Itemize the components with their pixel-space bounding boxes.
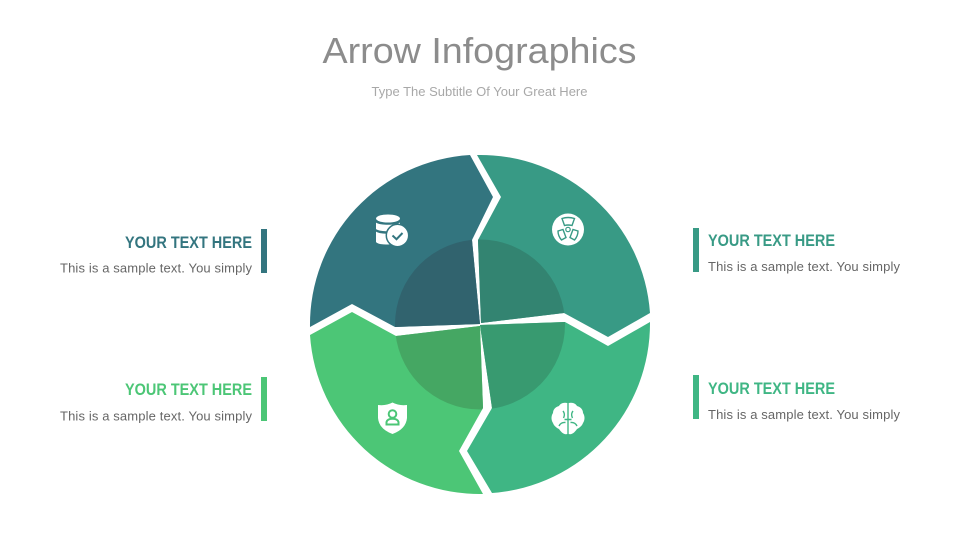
callout: top left (60, 229, 267, 276)
segment: top left (310, 155, 493, 327)
heading: YOUR TEXT HERE (708, 231, 835, 250)
icon: radiation (552, 214, 584, 246)
segment: bottom left (310, 312, 483, 494)
icon: database check (376, 214, 409, 247)
callout: bottom right (693, 375, 900, 422)
heading: YOUR TEXT HERE (125, 233, 252, 252)
accent bar (261, 377, 267, 421)
segment: top right (477, 155, 650, 337)
callout: top right (693, 228, 900, 274)
icon: shield with person (378, 402, 407, 434)
body text: This is a sample text. You simply (60, 260, 252, 276)
body text: This is a sample text. You simply (60, 408, 252, 424)
body text: This is a sample text. You simply (708, 259, 900, 274)
accent bar (693, 228, 699, 272)
accent bar (261, 229, 267, 273)
subtitle: Type The Subtitle Of Your Great Here (372, 84, 588, 99)
title: Arrow Infographics (322, 30, 636, 71)
icon: brain (552, 403, 584, 434)
heading: YOUR TEXT HERE (125, 380, 252, 399)
accent bar (693, 375, 699, 419)
body text: This is a sample text. You simply (708, 407, 900, 422)
circular arrow diagram (310, 155, 650, 494)
segment: bottom right (467, 322, 650, 493)
callout: bottom left (60, 377, 267, 424)
heading: YOUR TEXT HERE (708, 379, 835, 398)
